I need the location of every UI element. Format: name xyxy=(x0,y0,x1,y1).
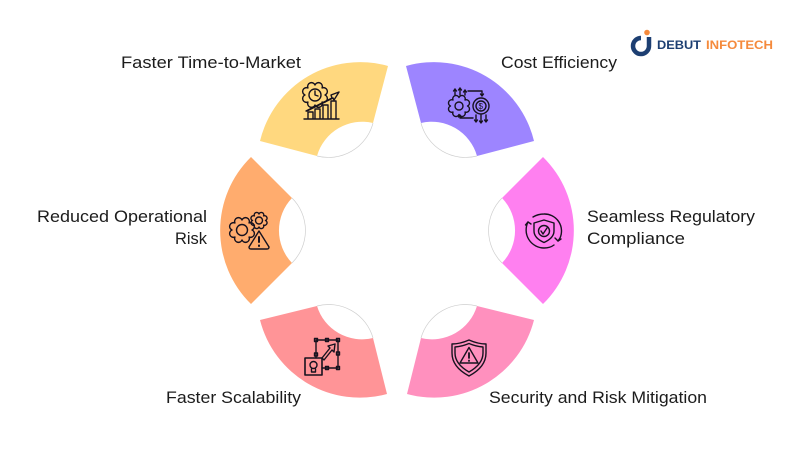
logo: Debut Infotech xyxy=(633,30,773,54)
icon: shield with check and cycle arrows xyxy=(526,214,562,248)
icon: gears and warning triangle xyxy=(230,212,269,249)
segment: Seamless Regulatory Compliance xyxy=(489,157,574,304)
icon: gear and dollar exchange: $ xyxy=(478,102,484,111)
label: Seamless Regulatory Compliance: Seamless Regulatory xyxy=(587,208,756,226)
segment: Cost Efficiency xyxy=(406,62,534,157)
label: Reduced Operational Risk: Risk xyxy=(175,230,208,248)
segment: Reduced Operational Risk xyxy=(220,157,305,304)
logo: Debut Infotech: DEBUT xyxy=(657,38,702,52)
icon: gear clock and growth chart xyxy=(303,83,339,119)
label: Faster Time-to-Market: Faster Time-to-Market xyxy=(121,54,301,72)
segment: Security and Risk Mitigation xyxy=(407,304,534,398)
label: Seamless Regulatory Compliance: Compliance xyxy=(587,230,685,248)
label: Cost Efficiency: Cost Efficiency xyxy=(501,54,618,72)
icon: shield with warning xyxy=(452,340,486,376)
label: Reduced Operational Risk: Reduced Operational xyxy=(37,208,207,226)
label: Seamless Regulatory Compliance xyxy=(587,208,756,248)
segment: Faster Time-to-Market xyxy=(260,62,388,157)
label: Reduced Operational Risk xyxy=(37,208,208,248)
label: Security and Risk Mitigation: Security and Risk Mitigation xyxy=(489,389,707,407)
icon: lightbulb box and scaling arrow xyxy=(305,338,340,375)
label: Faster Scalability: Faster Scalability xyxy=(166,389,302,407)
segment: Faster Scalability xyxy=(260,304,387,398)
logo: Debut Infotech: INFOTECH xyxy=(706,38,773,52)
